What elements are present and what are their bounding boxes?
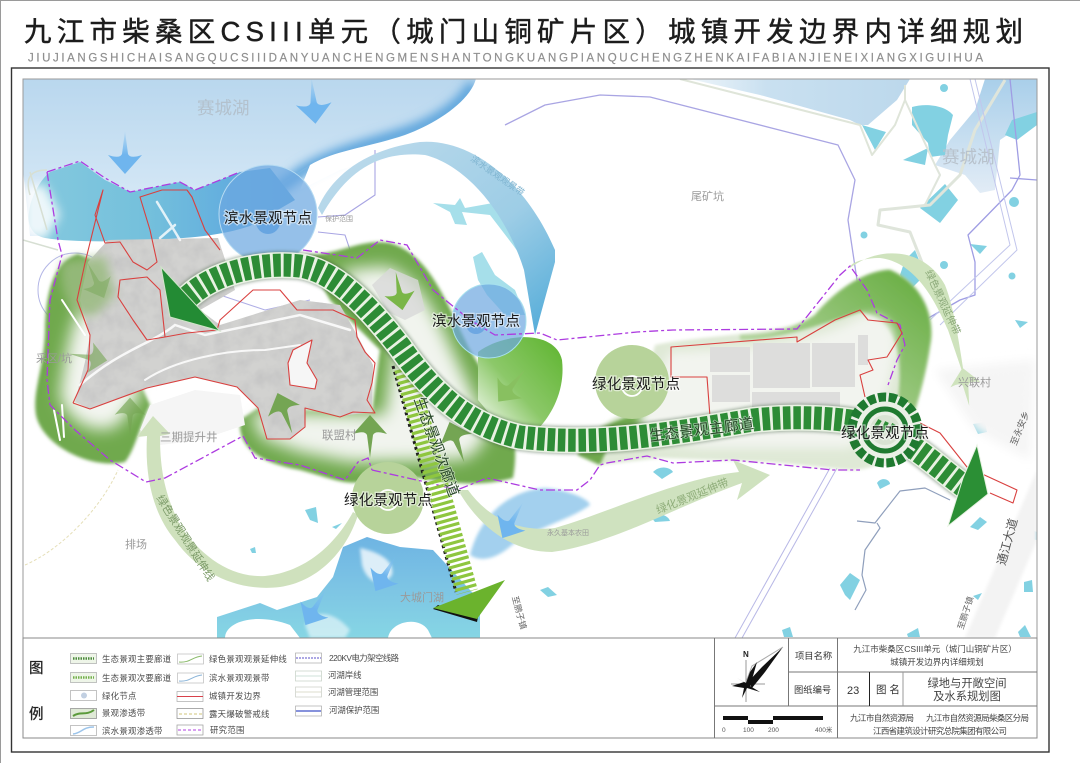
east village texture <box>946 366 1030 450</box>
river boundary lines <box>25 79 1037 638</box>
legend labels column 2: 露天爆破警戒线 <box>209 709 270 719</box>
corridor labels: 生态景观主廊道 <box>648 415 755 445</box>
place labels: 至鹏子镇 <box>955 595 976 631</box>
corridor labels: 绿色景观观景延伸线 <box>153 492 218 584</box>
south blue lake <box>217 537 480 638</box>
east belt base <box>578 270 931 470</box>
blue extension arc <box>318 142 555 335</box>
corridor labels: 绿化景观延伸带 <box>654 475 731 517</box>
green landscape node mid <box>595 345 669 419</box>
village patch south <box>140 390 245 445</box>
pond north of blue arc <box>433 198 517 250</box>
scale bar <box>722 716 833 734</box>
legend labels column 3 <box>328 653 400 715</box>
hill north green shading <box>61 256 115 316</box>
map border <box>23 79 1037 638</box>
legend labels column 2: 城镇开发边界 <box>209 691 261 701</box>
node labels: 滨水景观节点 <box>224 210 312 227</box>
green seepage belts <box>35 242 965 483</box>
legend labels column 3: 河湖岸线 <box>328 670 362 680</box>
scale bar: 100 <box>743 727 754 734</box>
east blue lake <box>470 488 590 559</box>
node labels <box>224 210 929 509</box>
loop interior white <box>288 340 317 389</box>
node labels: 绿化景观节点 <box>344 492 432 509</box>
place labels: 永久基本农田 <box>547 528 589 537</box>
place labels: 采区/坑 <box>36 351 72 365</box>
shore whitening <box>23 185 60 240</box>
swoop arrows water <box>108 77 537 633</box>
place labels: 排场 <box>125 537 147 551</box>
secondary corridor arrow <box>433 580 505 622</box>
east belt top right green <box>740 270 931 425</box>
middle blob <box>478 337 563 432</box>
place labels: 大城门湖 <box>400 590 444 604</box>
ring node <box>849 394 921 466</box>
legend labels column 1: 滨水景观渗透带 <box>102 726 163 736</box>
project name: 城镇开发边界内详细规划 <box>890 657 984 667</box>
hill roads <box>54 202 350 440</box>
lake top right <box>935 79 1037 193</box>
legend labels column 1: 绿化节点 <box>102 691 137 701</box>
drawing name: 及水系规划图 <box>933 689 1001 703</box>
main corridor <box>188 265 965 487</box>
lake shore blue band <box>29 162 295 241</box>
legend labels column 1 <box>102 654 172 736</box>
north arrow and wind rose: N <box>743 650 749 659</box>
title block <box>714 638 1037 738</box>
place labels: 至永安乡 <box>1008 409 1031 447</box>
east road strip <box>965 470 1037 638</box>
secondary corridor <box>393 366 467 592</box>
main corridor arrow northwest <box>161 267 220 331</box>
scale bar: 200 <box>768 727 779 734</box>
corridor labels: 滨水景观观景带 <box>469 153 527 198</box>
corridor labels: 绿色景观延伸带 <box>922 268 964 337</box>
swoop arrows green <box>66 257 984 468</box>
grey hill terrain <box>75 238 373 439</box>
place labels: 通江大道 <box>994 517 1020 567</box>
legend labels column 3: 河湖保护范围 <box>329 705 379 715</box>
legend heading <box>29 661 44 723</box>
lake top centre <box>690 79 910 125</box>
issuing organisations: 九江市自然资源局柴桑区分局 <box>926 713 1029 723</box>
node labels: 绿化景观节点 <box>841 425 929 442</box>
place labels: 保护范围 <box>325 214 353 223</box>
lake edge deep band <box>270 84 474 195</box>
east factory blocks <box>710 335 868 407</box>
legend swatches column 1 <box>70 654 96 736</box>
place labels: 尾矿坑 <box>691 189 724 203</box>
place labels: 三期提升井 <box>160 430 218 444</box>
corridor labels: 生态景观次廊道 <box>410 395 462 499</box>
east top light arc <box>850 253 965 380</box>
place labels: 赛城湖 <box>197 98 250 118</box>
place labels: 赛城湖 <box>942 147 994 167</box>
legend labels column 2: 滨水景观观景带 <box>209 673 270 683</box>
issuing organisations: 江西省建筑设计研究总院集团有限公司 <box>873 726 1007 736</box>
white land cap <box>302 80 485 185</box>
central blob interior <box>250 266 485 462</box>
project info labels <box>794 650 900 697</box>
west blob <box>35 254 150 464</box>
issuing organisations <box>850 713 1029 736</box>
project info labels: 图 名 <box>876 683 900 696</box>
blue waterfront node east <box>452 284 526 358</box>
main corridor arrow east <box>948 445 988 526</box>
project info labels: 项目名称 <box>795 650 832 661</box>
north arrow and wind rose <box>731 647 783 702</box>
green landscape node south <box>352 462 424 534</box>
legend labels column 3: 河湖管理范围 <box>328 687 378 697</box>
place labels <box>36 98 1031 631</box>
urban development boundary <box>73 190 1017 503</box>
scale bar: 400米 <box>815 725 833 734</box>
west blob interior <box>60 290 140 429</box>
east belt interior <box>640 315 895 448</box>
green extension arc west <box>137 416 358 588</box>
blue waterfront node west <box>219 165 317 263</box>
legend heading: 例 <box>29 706 44 723</box>
project name: 九江市柴桑区CSIII单元（城门山铜矿片区） <box>853 644 1017 654</box>
drawing name: 绿地与开敞空间 <box>927 676 1007 690</box>
legend labels column 2: 研究范围 <box>210 725 245 735</box>
project name <box>853 644 1017 667</box>
corridor labels <box>153 153 964 584</box>
title: 九江市柴桑区CSIII单元（城门山铜矿片区）城镇开发边界内详细规划 <box>24 16 1023 47</box>
map panel <box>23 77 1037 638</box>
legend heading: 图 <box>29 661 44 677</box>
place labels: 兴联村 <box>958 375 991 389</box>
place labels: 至鹏子镇 <box>510 595 529 631</box>
scale bar: 0 <box>722 727 726 734</box>
east belt bottom left green <box>578 410 650 465</box>
legend panel <box>23 638 1037 738</box>
node labels: 滨水景观节点 <box>432 313 520 330</box>
project info labels: 23 <box>847 685 859 697</box>
legend labels column 2 <box>209 654 287 735</box>
legend labels column 2: 绿色景观观景延伸线 <box>209 654 287 664</box>
project info labels: 图纸编号 <box>794 684 831 695</box>
legend labels column 3: 220KV电力架空线路 <box>329 653 400 663</box>
lake top left <box>23 79 476 236</box>
west coast lines <box>23 170 58 250</box>
legend labels column 1: 景观渗透带 <box>102 708 145 718</box>
pinyin subtitle: JIUJIANGSHICHAISANGQUCSIIIDANYUANCHENGMENSHANTONGKUANGPIANQUCHENGZHENKAIFABIANJIENEIXIANGXIGUIHUA <box>28 52 983 64</box>
issuing organisations: 九江市自然资源局 <box>850 713 914 723</box>
east ponds <box>250 84 1037 637</box>
village patch north <box>372 268 425 320</box>
research boundary dashed lines <box>47 161 905 490</box>
legend labels column 1: 生态景观主要廊道 <box>102 654 172 664</box>
green extension arc south <box>458 460 770 552</box>
legend swatches column 2 <box>177 654 204 735</box>
legend swatches column 3 <box>296 653 322 716</box>
drawing name <box>927 676 1007 703</box>
legend labels column 1: 生态景观次要廊道 <box>102 673 172 683</box>
node labels: 绿化景观节点 <box>592 376 680 393</box>
place labels: 联盟村 <box>322 428 357 442</box>
pond mid <box>473 252 525 315</box>
central blob <box>240 242 515 483</box>
south lake islands <box>225 548 432 638</box>
